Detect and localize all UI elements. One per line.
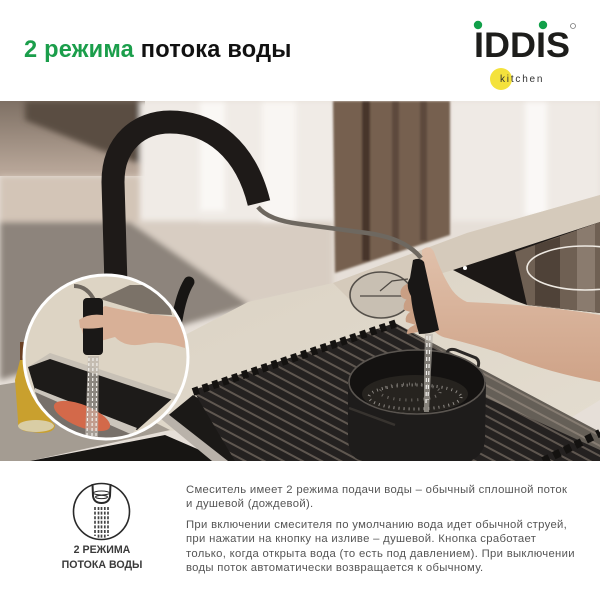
icon caption: 2 РЕЖИМА	[74, 544, 130, 556]
description paragraph 2: при нажатии на кнопку на изливе – душевой. Кнопка сработает	[186, 533, 536, 545]
pot	[348, 349, 486, 461]
bottle of oil	[15, 342, 55, 433]
description paragraph 1: Смеситель имеет 2 режима подачи воды – обычный сплошной поток	[186, 484, 567, 496]
description paragraph 2: воды поток автоматически возвращается к обычному.	[186, 562, 484, 574]
icon caption	[62, 544, 142, 570]
description paragraph 2: При включении смесителя по умолчанию вода идет обычной струей,	[186, 519, 567, 531]
brown curtain	[333, 101, 450, 273]
logo: IDDIS kitchen: IDDIS	[474, 26, 570, 65]
photo: kitchen sink scene	[0, 101, 600, 461]
left grey counter	[0, 375, 170, 461]
faucet lever	[177, 282, 189, 320]
description paragraph 2	[186, 519, 575, 574]
description paragraph 1: и душевой (дождевой).	[186, 498, 313, 510]
water stream	[424, 334, 433, 412]
cooktop	[453, 222, 600, 313]
spray head	[408, 259, 439, 334]
background room	[0, 101, 600, 461]
inset circle	[20, 270, 195, 445]
countertop	[0, 195, 600, 461]
description paragraph 2: только, когда открыта вода (то есть под давлением). При выключении	[186, 548, 575, 560]
faucet	[113, 122, 259, 285]
icon caption: ПОТОКА ВОДЫ	[62, 558, 142, 570]
logo: IDDIS kitchen	[474, 20, 576, 90]
round sink fitting	[350, 272, 412, 318]
black sink	[165, 395, 300, 461]
arm and hand	[400, 247, 600, 382]
drying rack	[192, 320, 600, 461]
description paragraph 1	[186, 484, 567, 510]
hose	[258, 207, 421, 258]
icon: water flow modes	[72, 482, 130, 540]
title: 2 режима потока воды	[24, 37, 292, 63]
logo: IDDIS kitchen: kitchen	[500, 74, 544, 85]
